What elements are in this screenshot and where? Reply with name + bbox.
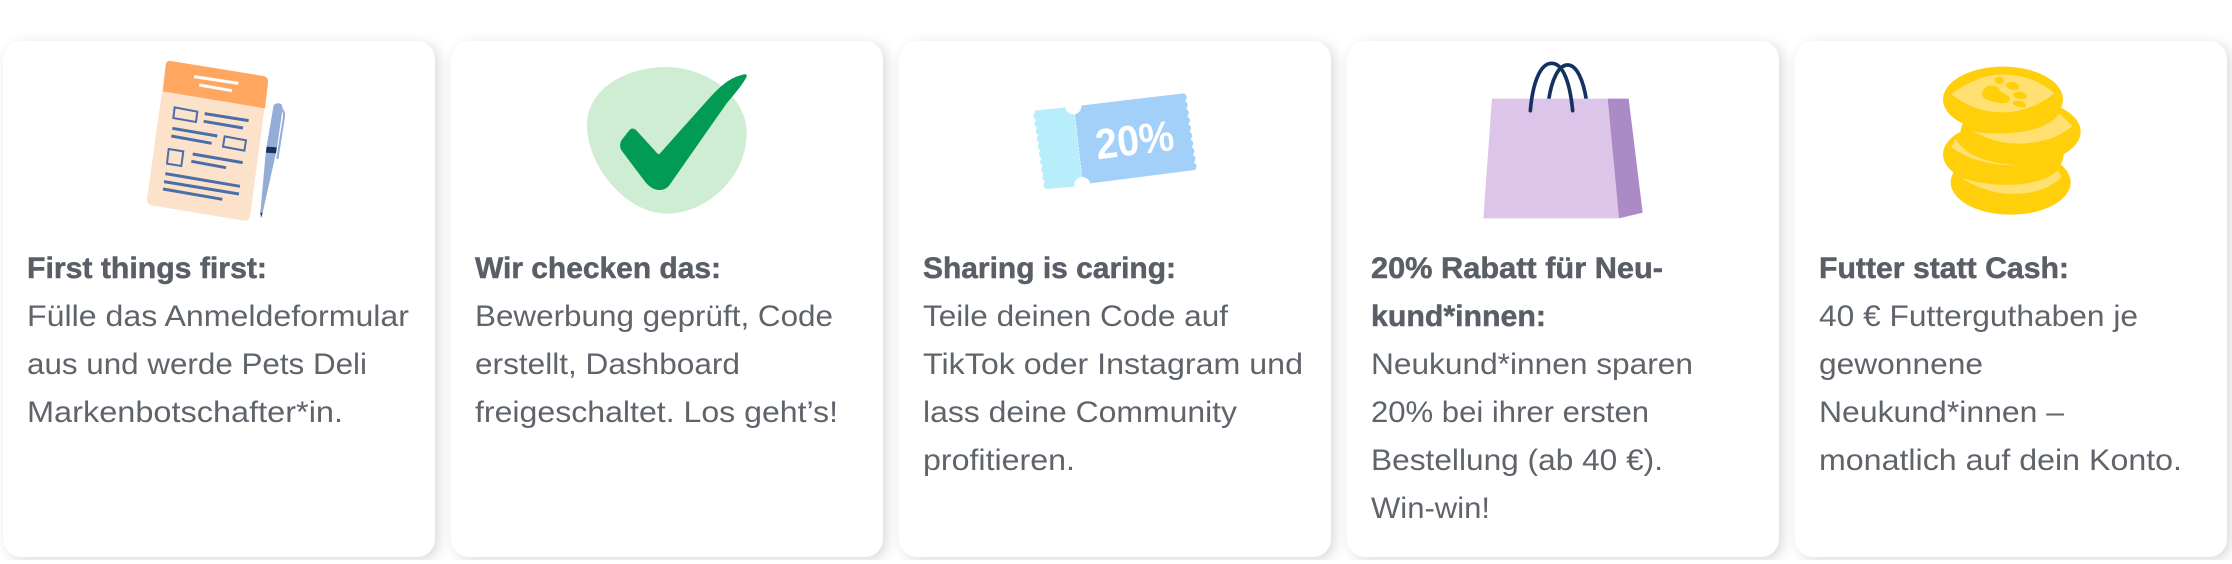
text: step 3 copy: profitieren. bbox=[923, 444, 1075, 477]
text: step 4 copy: kund*innen: bbox=[1371, 300, 1546, 333]
text: step 1 copy: aus und werde Pets Deli bbox=[27, 348, 367, 381]
panel: step 5 futter statt cash bbox=[1795, 41, 2227, 557]
text: step 4 copy: Win-win! bbox=[1371, 492, 1490, 525]
text: step 2 copy: freigeschaltet. Los geht’s! bbox=[475, 396, 838, 429]
text: step 5 copy: monatlich auf dein Konto. bbox=[1819, 444, 2182, 477]
text: step 1 copy: First things first: bbox=[27, 252, 267, 285]
text: step 1 copy: Markenbotschafter*in. bbox=[27, 396, 343, 429]
text: step 5 copy: 40 € Futterguthaben je bbox=[1819, 300, 2138, 333]
panel: step 4 rabatt bbox=[1347, 41, 1779, 557]
text: step 2 copy: Wir checken das: bbox=[475, 252, 721, 285]
panel: step 3 sharing is caring bbox=[899, 41, 1331, 557]
text: step 4 copy: Bestellung (ab 40 €). bbox=[1371, 444, 1663, 477]
text: step 5 copy: Futter statt Cash: bbox=[1819, 252, 2069, 285]
text: step 4 copy: 20% bei ihrer ersten bbox=[1371, 396, 1649, 429]
panel: step 2 wir checken das bbox=[451, 41, 883, 557]
text: step 5 copy: Neukund*innen – bbox=[1819, 396, 2064, 429]
icon: form and pen bbox=[147, 61, 285, 221]
text: step 5 copy bbox=[1819, 252, 2182, 477]
icon: 20 percent coupon bbox=[1033, 93, 1197, 193]
icon: shopping bag bbox=[1483, 63, 1643, 218]
text: step 4 copy: Neukund*innen sparen bbox=[1371, 348, 1693, 381]
text: step 3 copy: TikTok oder Instagram und bbox=[923, 348, 1303, 381]
icon: stack of gold coins with paw bbox=[1943, 67, 2081, 215]
panel: step 1 first things first bbox=[3, 41, 435, 557]
text: step 4 copy bbox=[1371, 252, 1693, 525]
icon: 20 percent coupon: 20% bbox=[1093, 112, 1177, 169]
text: step 3 copy: Sharing is caring: bbox=[923, 252, 1176, 285]
text: step 5 copy: gewonnene bbox=[1819, 348, 1983, 381]
text: step 1 copy: Fülle das Anmeldeformular bbox=[27, 300, 409, 333]
text: step 2 copy bbox=[475, 252, 838, 429]
text: step 3 copy: Teile deinen Code auf bbox=[923, 300, 1229, 333]
text: step 4 copy: 20% Rabatt für Neu- bbox=[1371, 252, 1663, 285]
text: step 1 copy bbox=[27, 252, 409, 429]
text: step 2 copy: erstellt, Dashboard bbox=[475, 348, 740, 381]
text: step 3 copy: lass deine Community bbox=[923, 396, 1237, 429]
text: step 3 copy bbox=[923, 252, 1303, 477]
icon: green check mark bbox=[587, 67, 747, 214]
text: step 2 copy: Bewerbung geprüft, Code bbox=[475, 300, 833, 333]
